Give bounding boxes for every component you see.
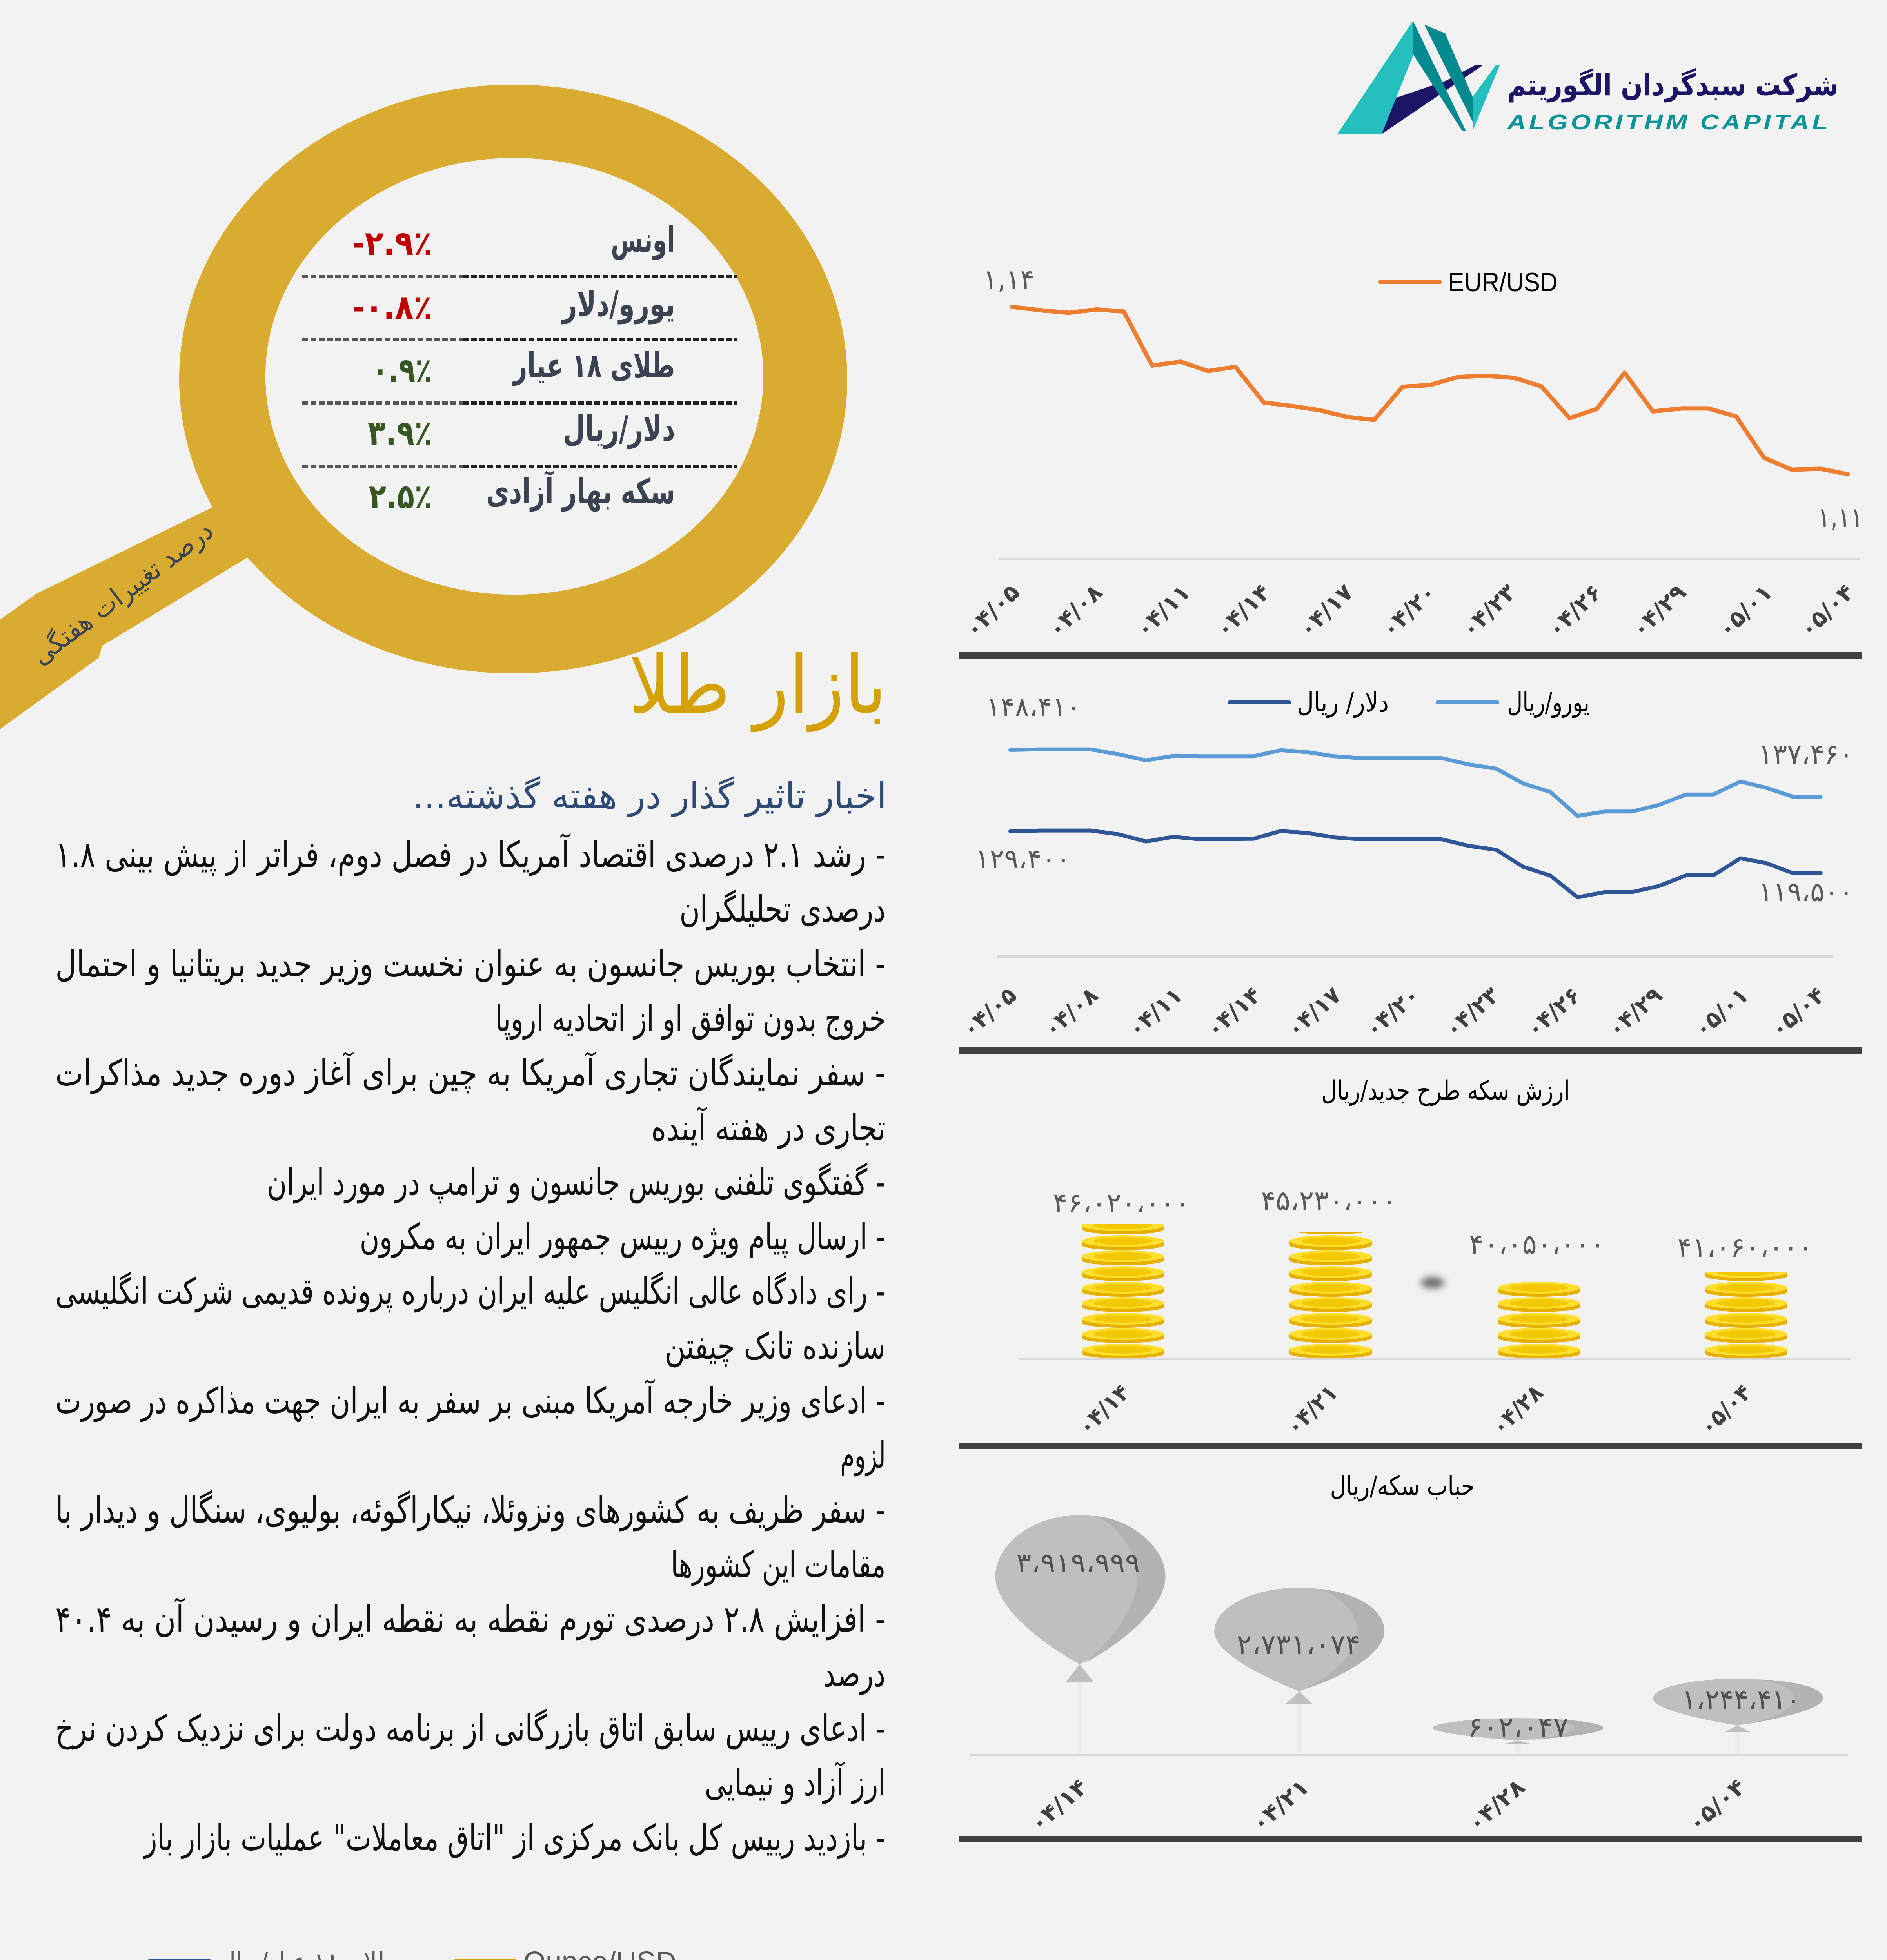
panel: new design coin value	[1019, 1075, 1851, 1440]
x axis labels: ۰۴/۱۴	[1201, 982, 1266, 1043]
x axis labels: ۰۵/۰۴	[1765, 982, 1830, 1043]
news list: درصد	[823, 1653, 885, 1695]
news list: سازنده تانک چیفتن	[665, 1325, 885, 1368]
news block	[55, 775, 887, 1859]
value labels: ۱۴۸،۴۱۰	[986, 691, 1081, 723]
x axis labels: ۰۵/۰۴	[1683, 1773, 1750, 1837]
news list: - رای دادگاه عالی انگلیس علیه ایران درباره پرونده قدیمی شرکت انگلیسی	[55, 1270, 886, 1313]
row: euro/dollar: یورو/دلار	[561, 284, 675, 325]
balloon value labels	[1016, 1547, 1800, 1743]
logo	[1337, 21, 1839, 134]
news list: درصدی تحلیلگران	[679, 888, 886, 931]
x axis labels: ۰۴/۲۱	[1246, 1773, 1314, 1837]
row: 18k gold	[372, 345, 675, 390]
row: 18k gold: طلای ۱۸ عیار	[512, 345, 675, 386]
legend	[1228, 687, 1589, 718]
start value: ۱,۱۴	[983, 263, 1034, 296]
news list: - رشد ۲.۱ درصدی اقتصاد آمریکا در فصل دوم، فراتر از پیش بینی ۱.۸	[55, 833, 886, 876]
legend	[147, 1946, 676, 1960]
row: 18k gold: ۰.۹٪	[372, 351, 432, 390]
news list: - ادعای وزیر خارجه آمریکا مبنی بر سفر به ایران جهت مذاکره در صورت	[55, 1379, 886, 1422]
magnifier handle	[0, 470, 314, 729]
x axis labels: ۰۴/۲۳	[1456, 579, 1521, 643]
value labels	[975, 691, 1853, 908]
news list: تجاری در هفته آینده	[651, 1106, 886, 1149]
value labels: ۱۳۷،۴۶۰	[1758, 738, 1853, 770]
value labels: ۱۱۹،۵۰۰	[1758, 876, 1853, 908]
row: dollar/rial: ۳.۹٪	[368, 414, 432, 453]
coin value labels: ۴۵،۲۳۰،۰۰۰	[1261, 1185, 1397, 1217]
chart title: حباب سکه/ریال	[1330, 1471, 1475, 1502]
balloon value labels: ۶۰۲،۰۴۷	[1468, 1711, 1568, 1743]
coin value labels: ۴۶،۰۲۰،۰۰۰	[1053, 1187, 1190, 1219]
x axis labels: ۰۴/۲۳	[1439, 982, 1504, 1043]
chart lines	[1010, 750, 1821, 897]
x axis labels: ۰۵/۰۴	[1794, 579, 1859, 643]
news list: - انتخاب بوریس جانسون به عنوان نخست وزیر جدید بریتانیا و احتمال	[55, 943, 886, 985]
x axis labels: ۰۵/۰۱	[1689, 982, 1754, 1043]
row: bahar azadi coin	[369, 470, 675, 516]
x axis labels: ۰۴/۱۴	[1073, 1379, 1135, 1440]
chart title: ارزش سکه طرح جدید/ریال	[1321, 1075, 1570, 1106]
x axis labels: ۰۴/۰۸	[1042, 579, 1108, 643]
x axis labels: ۰۵/۰۴	[1694, 1379, 1756, 1440]
panel: EUR/USD line chart	[960, 263, 1863, 643]
balloons	[995, 1515, 1823, 1753]
title: بازار طلا	[629, 639, 887, 732]
news list: - سفر نمایندگان تجاری آمریکا به چین برای آغاز دوره جدید مذاکرات	[55, 1051, 886, 1094]
logo: شرکت سبدگردان الگوریتم	[1507, 67, 1839, 103]
news list: - ادعای رییس سابق اتاق بازرگانی از برنامه دولت برای نزدیک کردن نرخ	[55, 1708, 886, 1750]
x axis labels: ۰۴/۱۷	[1293, 579, 1358, 643]
news list: لزوم	[840, 1434, 886, 1477]
coin stack 05/04	[1705, 1266, 1787, 1359]
row: dollar/rial	[368, 408, 675, 453]
x axis labels	[960, 579, 1859, 643]
panel: gold line chart	[84, 1946, 1805, 1960]
x axis labels: ۰۴/۲۰	[1376, 579, 1441, 643]
x axis labels: ۰۴/۲۶	[1521, 982, 1586, 1043]
x axis labels: ۰۴/۰۵	[960, 579, 1025, 643]
logo: ALGORITHM CAPITAL	[1506, 111, 1831, 134]
balloon value labels: ۳،۹۱۹،۹۹۹	[1016, 1547, 1140, 1579]
row: dollar/rial: دلار/ریال	[563, 408, 675, 449]
news list: - سفر ظریف به کشورهای ونزوئلا، نیکاراگوئه، بولیوی، سنگال و دیدار با	[55, 1489, 886, 1532]
x axis labels: ۰۴/۲۶	[1542, 579, 1607, 643]
news list: مقامات این کشورها	[671, 1544, 886, 1586]
x axis labels: ۰۴/۱۴	[1025, 1773, 1092, 1837]
panel: coin bubble balloons	[970, 1471, 1848, 1837]
x axis labels: ۰۴/۱۷	[1281, 982, 1346, 1043]
row: ounce: اونس	[611, 220, 675, 260]
x axis labels: ۰۴/۲۹	[1626, 579, 1691, 643]
coin stack 04/21	[1289, 1220, 1372, 1359]
x axis labels: ۰۴/۱۱	[1130, 579, 1195, 643]
row: euro/dollar: -۰.۸٪	[352, 288, 432, 327]
row: bahar azadi coin: ۲.۵٪	[369, 477, 432, 516]
news list: - افزایش ۲.۸ درصدی تورم نقطه به نقطه ایران و رسیدن آن به ۴۰.۴	[55, 1597, 886, 1641]
x axis labels	[957, 982, 1830, 1043]
legend	[1378, 267, 1558, 297]
news list	[55, 833, 886, 1859]
balloon value labels: ۲،۷۳۱،۰۷۴	[1237, 1628, 1360, 1661]
row: euro/dollar	[352, 284, 675, 327]
coin value labels	[1053, 1185, 1813, 1263]
magnifier: weekly change table	[0, 85, 847, 729]
x axis labels: ۰۴/۰۸	[1038, 982, 1103, 1043]
value labels: ۱۲۹،۴۰۰	[975, 843, 1070, 875]
news list: ارز آزاد و نیمایی	[705, 1761, 885, 1804]
x axis labels: ۰۴/۱۱	[1122, 982, 1188, 1043]
magnifier ring	[179, 85, 847, 673]
handle caption: درصد تغییرات هفتگی	[26, 515, 219, 671]
x axis labels: ۰۴/۱۴	[1210, 579, 1275, 643]
legend: یورو/ریال	[1507, 687, 1589, 718]
blurred mark	[1421, 1277, 1444, 1288]
row: ounce: -۲.۹٪	[352, 224, 432, 263]
x axis labels: ۰۴/۲۰	[1360, 982, 1425, 1043]
x axis labels: ۰۴/۲۹	[1602, 982, 1667, 1043]
coin stack 04/28	[1498, 1282, 1580, 1359]
legend: دلار/ ریال	[1297, 687, 1389, 718]
legend: EUR/USD	[1448, 267, 1558, 297]
coin value labels: ۴۱،۰۶۰،۰۰۰	[1677, 1231, 1813, 1263]
x axis labels: ۰۴/۲۸	[1486, 1379, 1548, 1440]
balloon value labels: ۱،۲۴۴،۴۱۰	[1682, 1684, 1800, 1716]
x axis labels: ۰۴/۰۵	[957, 982, 1022, 1043]
panel: dollar and euro to rial line chart	[957, 687, 1853, 1043]
news list: - گفتگوی تلفنی بوریس جانسون و ترامپ در مورد ایران	[267, 1161, 886, 1204]
row: ounce	[352, 220, 675, 263]
x axis labels: ۰۴/۲۱	[1281, 1379, 1343, 1440]
x axis labels	[1073, 1379, 1756, 1440]
EUR/USD line	[1012, 307, 1848, 474]
news list: خروج بدون توافق او از اتحادیه اروپا	[495, 998, 886, 1040]
end value: ۱,۱۱	[1818, 501, 1863, 534]
news list: - ارسال پیام ویژه رییس جمهور ایران به مکرون	[360, 1216, 885, 1258]
row: bahar azadi coin: سکه بهار آزادی	[486, 470, 675, 512]
x axis labels: ۰۵/۰۱	[1713, 579, 1778, 643]
x axis labels: ۰۴/۲۸	[1462, 1773, 1530, 1837]
news list: - بازدید رییس کل بانک مرکزی از "اتاق معاملات" عملیات بازار باز	[143, 1817, 886, 1859]
coin stack 04/14	[1082, 1220, 1164, 1359]
x axis labels	[1025, 1773, 1750, 1837]
coin value labels: ۴۰،۰۵۰،۰۰۰	[1469, 1228, 1605, 1260]
news heading: اخبار تاثیر گذار در هفته گذشته...	[412, 775, 887, 817]
